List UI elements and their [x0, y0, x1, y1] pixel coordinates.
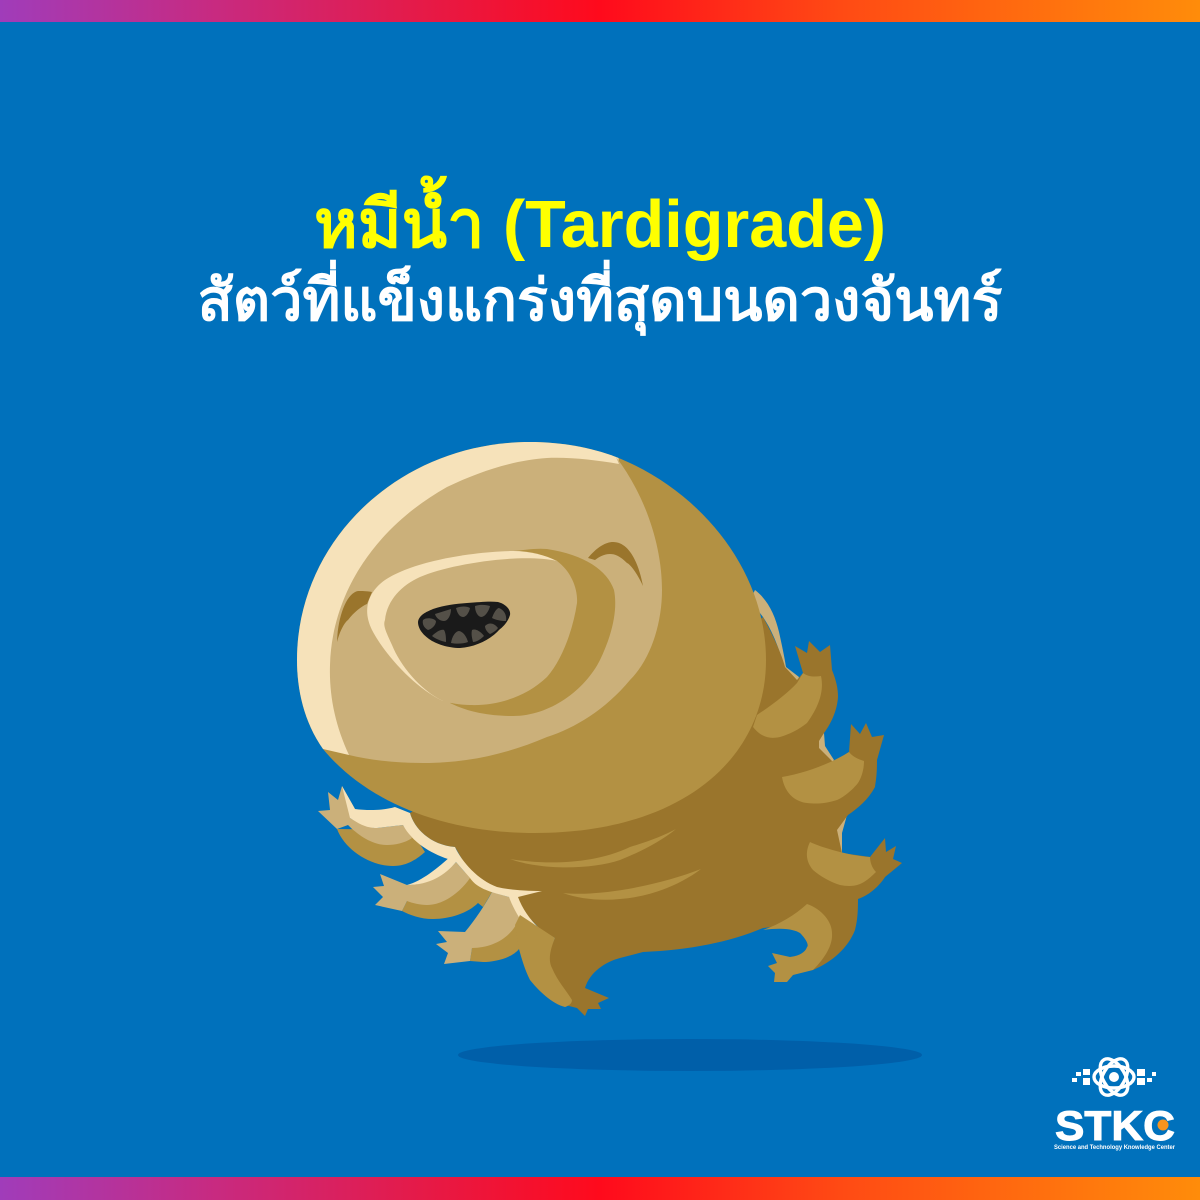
logo pixels	[1072, 1069, 1156, 1085]
title: หมีน้ำ (Tardigrade)	[314, 188, 886, 262]
logo wordmark: STKC	[1055, 1102, 1175, 1149]
top gradient bar	[0, 0, 1200, 22]
ground shadow	[458, 1039, 922, 1071]
logo caption: Science and Technology Knowledge Center	[1054, 1145, 1176, 1151]
head light face	[330, 457, 662, 763]
mouth	[418, 602, 510, 648]
leg highlights	[510, 673, 876, 1007]
subtitle: สัตว์ที่แข็งแกร่งที่สุดบนดวงจันทร์	[198, 269, 1002, 333]
leg: far left top	[318, 786, 425, 866]
leg: far left middle	[373, 855, 492, 919]
snout light	[384, 558, 577, 705]
body	[410, 617, 902, 1016]
head shadow base	[297, 442, 766, 833]
brow left	[337, 591, 372, 642]
logo emblem	[1094, 1054, 1134, 1100]
head cream rim	[280, 430, 619, 755]
bottom gradient bar	[0, 1177, 1200, 1200]
snout shadow	[450, 549, 615, 716]
illustration: tardigrade	[297, 442, 922, 1071]
teeth	[423, 605, 506, 644]
snout cream	[367, 551, 577, 701]
leg: near left middle	[436, 892, 555, 964]
brow right	[588, 542, 643, 586]
back body highlights	[750, 590, 847, 853]
far legs	[318, 786, 555, 964]
cream band under head	[395, 807, 542, 929]
head	[297, 442, 766, 833]
logo orange dot	[1158, 1120, 1168, 1130]
